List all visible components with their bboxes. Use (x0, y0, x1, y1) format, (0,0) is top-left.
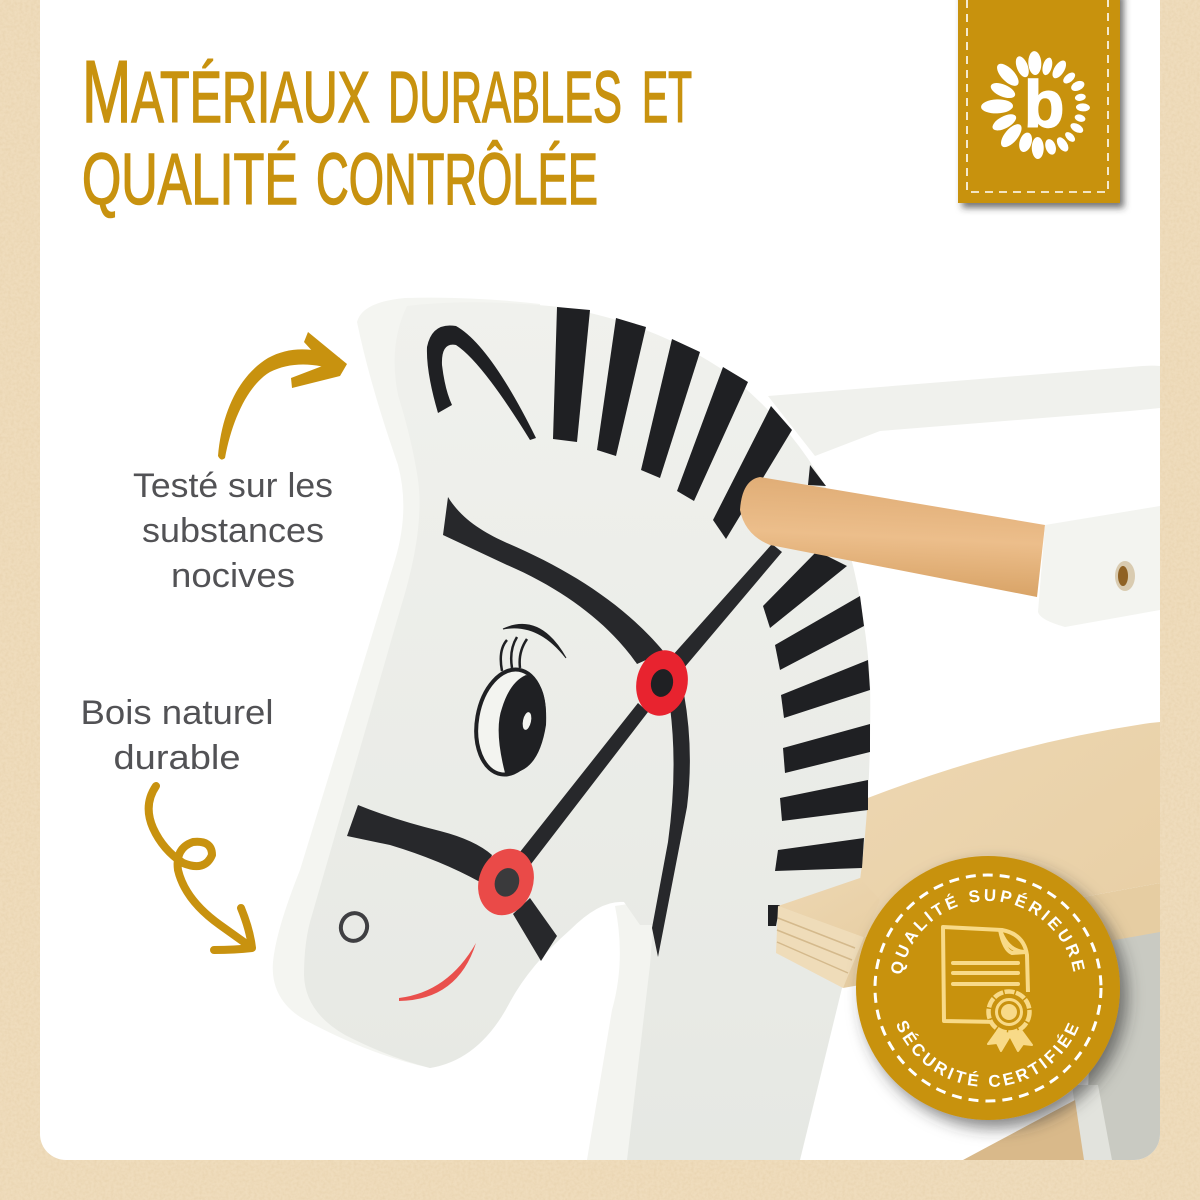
seat board top (850, 722, 1160, 937)
title (82, 42, 692, 220)
product photo: zebra rocking horse (273, 298, 1160, 1160)
lower red ring (478, 848, 534, 916)
callout: durable natural wood: durable (114, 739, 240, 777)
horse body (627, 898, 842, 1160)
nostril (338, 911, 370, 943)
title: ET (642, 58, 692, 138)
wooden dowel (740, 477, 1045, 597)
title: DURABLES (388, 58, 622, 138)
rear white leg (1072, 1085, 1112, 1160)
brand tag with logo (958, 0, 1120, 203)
eye (468, 624, 566, 780)
badge top text: QUALITÉ SUPÉRIEURE (891, 889, 1085, 974)
ear (427, 325, 536, 440)
logo letter b: b (1024, 67, 1064, 141)
badge bottom text: SÉCURITÉ CERTIFIÉE (897, 1020, 1079, 1087)
horse face front (304, 302, 870, 1068)
tag stitching (967, 0, 1108, 192)
badge dashed ring (875, 875, 1101, 1101)
callout: tested for harmful substances: substances (142, 512, 324, 550)
callout: durable natural wood (80, 694, 274, 777)
white side block (1038, 506, 1160, 627)
badge disc (856, 856, 1120, 1120)
white gap under muzzle (470, 895, 620, 1160)
horse head outer edge (273, 298, 560, 1068)
title: QUALITÉ (82, 140, 298, 220)
quality badge (851, 852, 1138, 1140)
upper red ring (636, 650, 688, 716)
arrow: top curved arrow to horse (218, 332, 347, 460)
tag ribbon (958, 0, 1120, 203)
lower wood rocker (963, 1100, 1084, 1160)
callout: tested for harmful substances: Testé sur les (133, 467, 333, 505)
horse neck light edge (587, 900, 655, 1160)
back handle (768, 366, 1160, 456)
mane stripes (553, 307, 870, 926)
callout: tested for harmful substances (133, 467, 333, 595)
screw (1115, 561, 1135, 591)
rear grey leg (1085, 925, 1160, 1160)
halter straps (347, 497, 782, 961)
title: MATÉRIAUX (82, 42, 370, 141)
arrow: looping arrow to horse (149, 786, 252, 950)
icon: certificate document (943, 927, 1032, 1051)
title: CONTRÔLÉE (316, 140, 598, 220)
seat plywood front (776, 878, 1160, 988)
callout: durable natural wood: Bois naturel (80, 694, 274, 732)
callout: tested for harmful substances: nocives (171, 557, 295, 595)
logo flower petals (981, 51, 1090, 159)
mouth (399, 943, 476, 1001)
